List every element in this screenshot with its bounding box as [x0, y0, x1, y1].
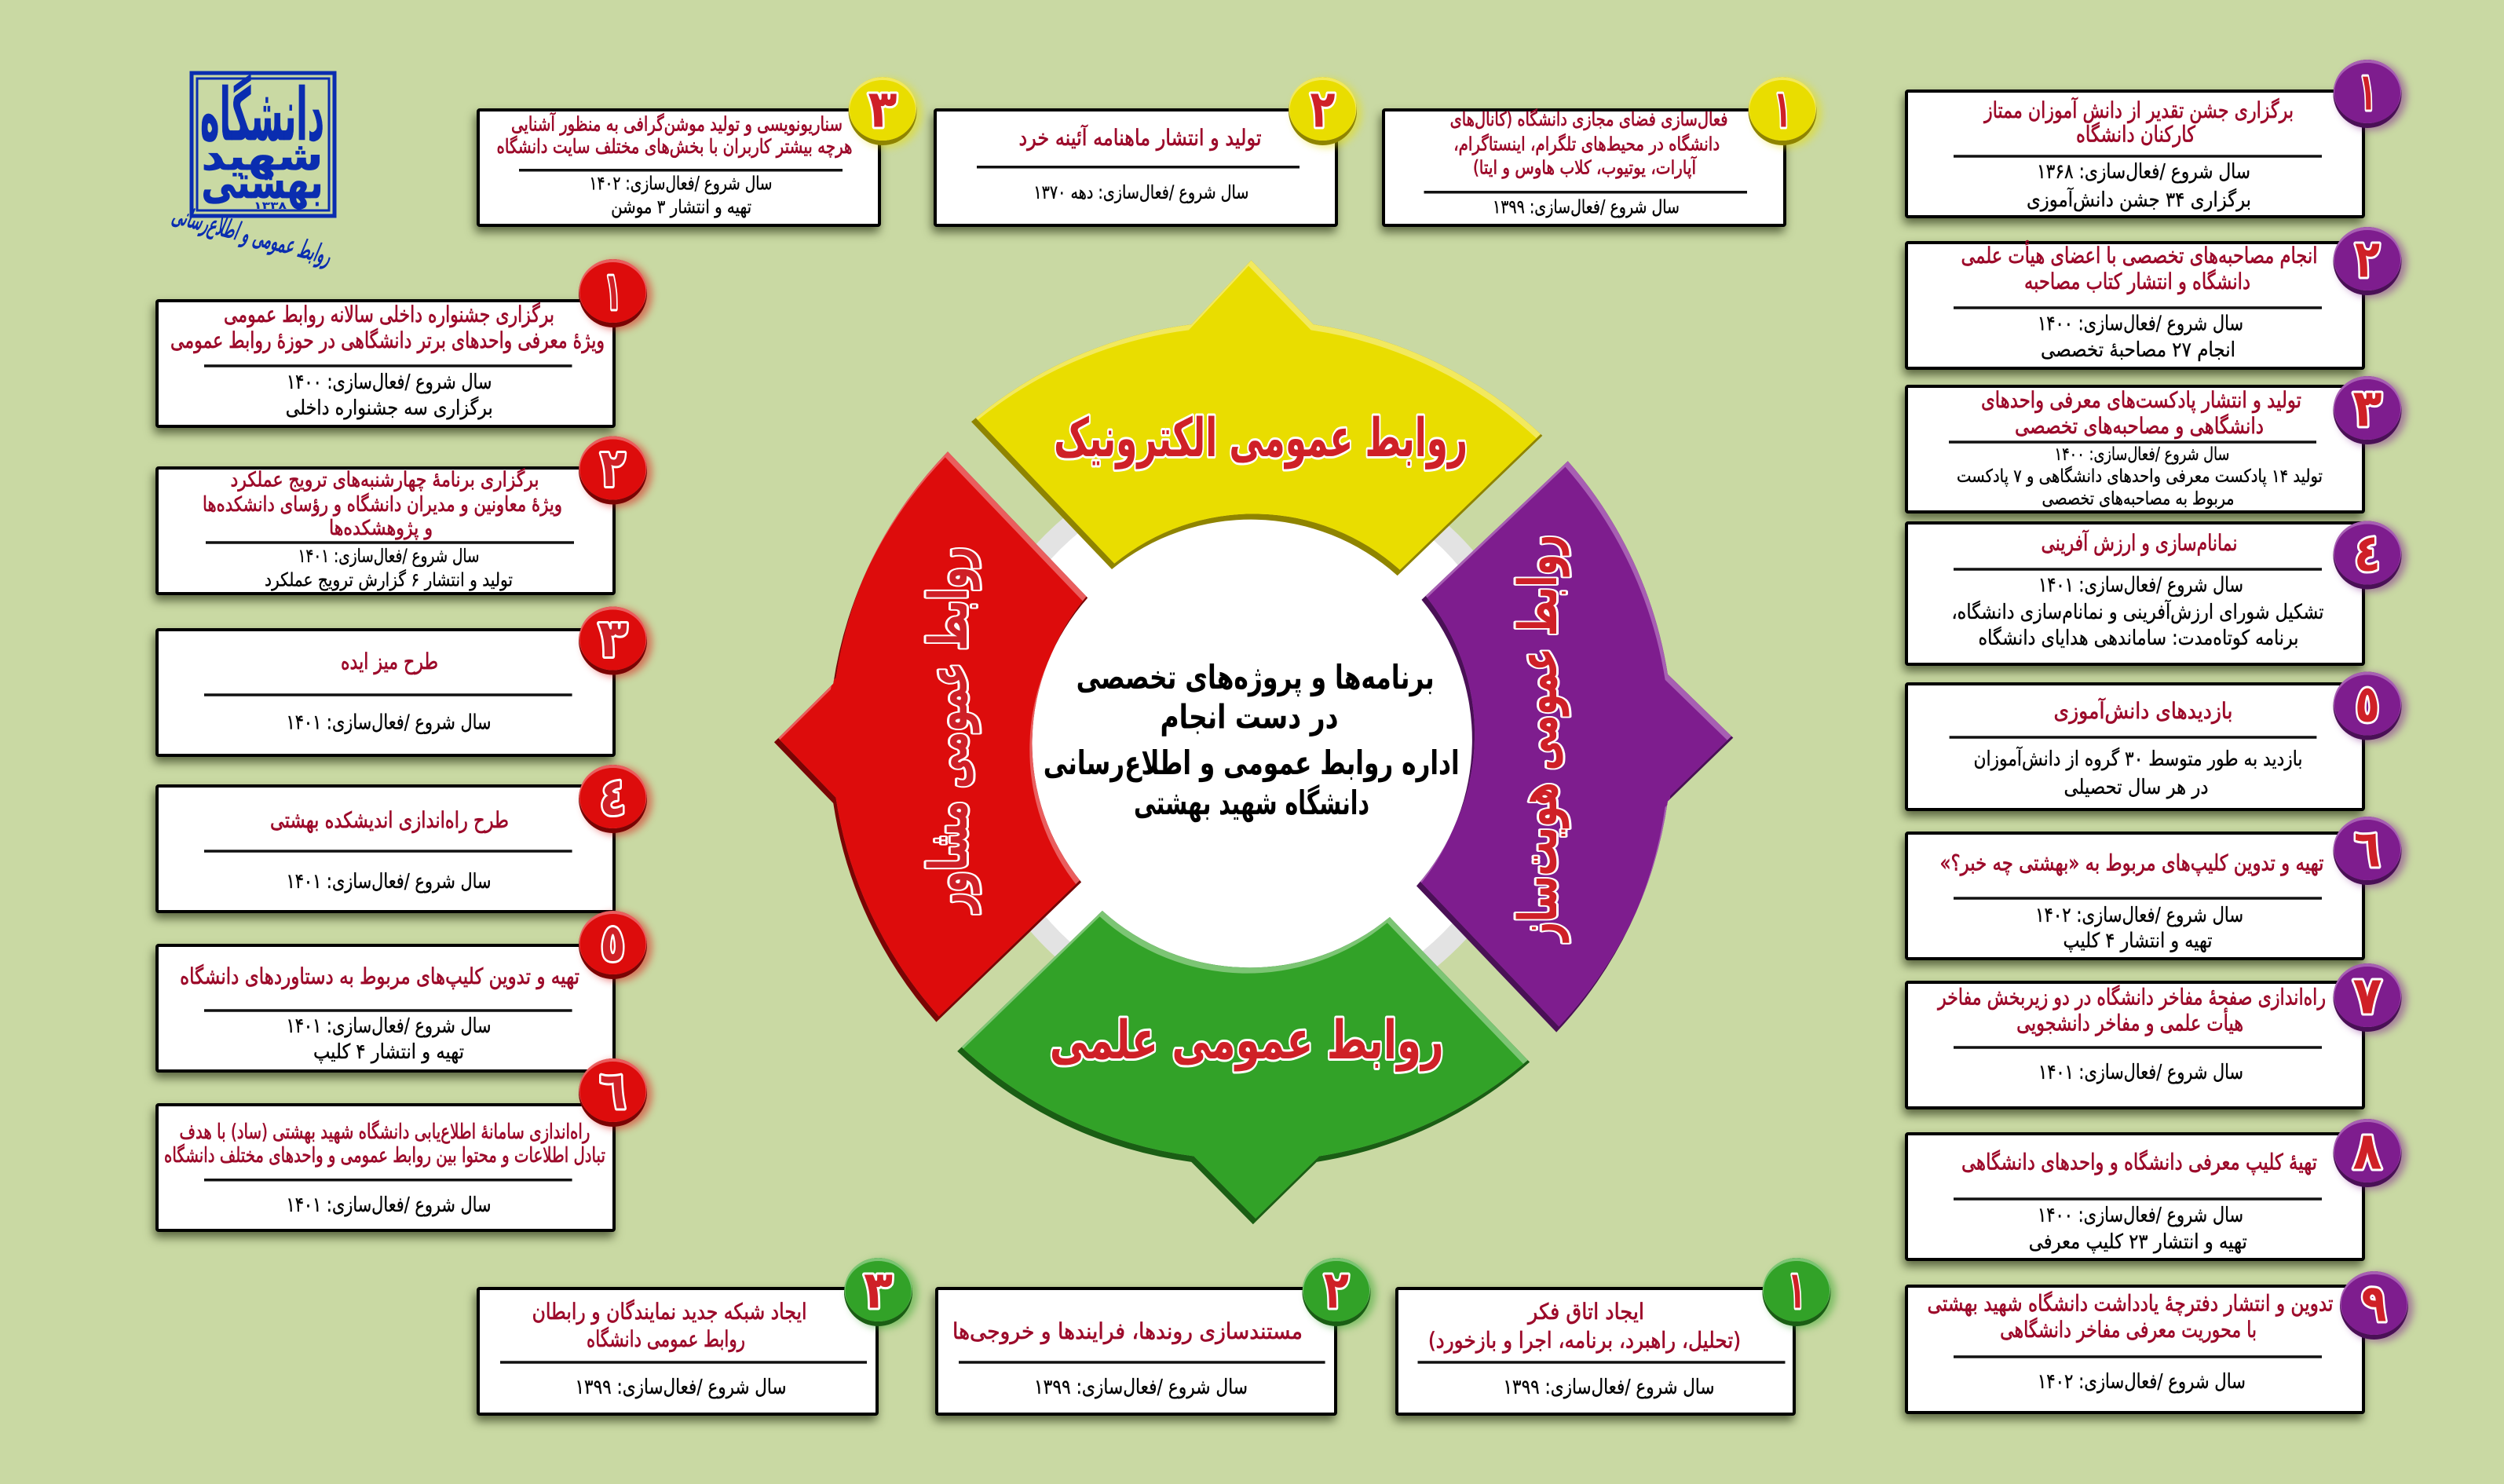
number badge: ۲ [1310, 79, 1335, 140]
details text: انجام ۲۷ مصاحبهٔ تخصصی [2041, 338, 2235, 362]
number badge: ۷ [2352, 966, 2382, 1025]
logo: ۱۳۳۸ [254, 200, 287, 212]
details text: سال شروع /فعال‌سازی: ۱۴۰۰ [2038, 1204, 2243, 1227]
details text: سال شروع /فعال‌سازی: ۱۴۰۰ [2038, 313, 2243, 336]
details text: برنامه کوتاه‌مدت: ساماندهی هدایای دانشگاه [1979, 626, 2299, 650]
number badge [2340, 1271, 2414, 1342]
title text [170, 302, 605, 353]
panel: left card 4 [157, 765, 652, 912]
panel: right card 8 [1906, 1119, 2407, 1259]
details text [286, 1014, 492, 1064]
title text [1961, 239, 2318, 294]
details text: سال شروع /فعال‌سازی: ۱۴۰۲ [2035, 904, 2243, 927]
details text: تهیه و انتشار ۳ موشن [611, 196, 751, 218]
title text: ویژهٔ معاونین و مدیران دانشگاه و رؤسای دانشکده‌ها [203, 492, 562, 517]
title text: برگزاری برنامهٔ چهارشنبه‌های ترویج عملکرد [231, 468, 539, 492]
details text [1974, 746, 2302, 799]
panel: left card 5 [157, 911, 652, 1071]
details text [1957, 444, 2323, 509]
details text: سال شروع /فعال‌سازی: ۱۳۹۹ [1504, 1376, 1715, 1399]
details text: تشکیل شورای ارزش‌آفرینی و نمانام‌سازی دانشگاه، [1952, 599, 2324, 624]
number badge [579, 1058, 652, 1129]
number badge: ۲ [2355, 229, 2380, 289]
details text: تولید و انتشار ۶ گزارش ترویج عملکرد [265, 569, 513, 591]
title text: انجام مصاحبه‌های تخصصی با اعضای هیأت علمی [1961, 239, 2318, 269]
number badge [579, 911, 652, 981]
number badge [579, 437, 652, 507]
panel: bottom card 3 [478, 1258, 917, 1414]
logo: شهید [201, 133, 324, 180]
number badge: ۱ [1788, 1259, 1805, 1321]
title text: آپارات، یوتیوب، کلاب هاوس و ایتا) [1473, 156, 1697, 179]
title text: ویژهٔ معرفی واحدهای برتر دانشگاهی در حوزهٔ روابط عمومی [170, 327, 605, 353]
number badge: ۹ [2362, 1274, 2387, 1333]
details text [1952, 573, 2324, 650]
panel: bottom card 2 [937, 1258, 1376, 1414]
number badge: ۱ [2359, 61, 2376, 122]
details text: سال شروع /فعال‌سازی: ۱۴۰۱ [286, 711, 492, 734]
title text: (تحلیل، راهبرد، برنامه، اجرا و بازخورد) [1428, 1328, 1741, 1354]
number badge [2334, 60, 2407, 130]
number badge: ٦ [2354, 818, 2381, 879]
panel: left card 3 [157, 606, 652, 755]
segment label: identity: روابط عمومی هویت‌ساز [1508, 535, 1570, 943]
title text [532, 1299, 807, 1352]
number badge: ٥ [2355, 674, 2380, 734]
title text: تهیه و تدوین کلیپ‌های مربوط به «بهشتی چه خبر؟» [1939, 850, 2324, 876]
details text [2029, 1204, 2247, 1254]
title text [1981, 387, 2301, 439]
title text [203, 468, 562, 540]
logo [169, 73, 335, 272]
title text: هیأت علمی و مفاخر دانشجویی [2016, 1007, 2243, 1036]
central title: در دست انجام [1161, 697, 1338, 737]
title text: طرح میز ایده [341, 649, 438, 674]
number badge: ۱ [1774, 79, 1791, 140]
details text: برگزاری ۳۴ جشن دانش‌آموزی [2027, 187, 2251, 212]
panel: left card 6 [157, 1058, 652, 1230]
text: دانشگاه [200, 73, 324, 157]
title text: تدوین و انتشار دفترچهٔ یادداشت دانشگاه شهید بهشتی [1927, 1290, 2334, 1316]
title text: و پژوهشکده‌ها [329, 517, 433, 540]
central diagram [772, 254, 1736, 1230]
details text: سال شروع /فعال‌سازی: ۱۳۹۹ [1493, 196, 1680, 218]
panel: right card 2 [1906, 227, 2407, 368]
central title: برنامه‌ها و پروژه‌های تخصصی [1077, 658, 1435, 697]
title text: تبادل اطلاعات و محتوا بین روابط عمومی و واحدهای مختلف دانشگاه [164, 1143, 605, 1168]
panel: top card 3 [478, 77, 922, 225]
panel: right card 1 [1906, 60, 2407, 217]
central title: اداره روابط عمومی و اطلاع‌رسانی [1044, 744, 1460, 783]
number badge [2334, 963, 2407, 1034]
title text [1927, 1290, 2334, 1343]
details text [265, 545, 513, 591]
title text: هرچه بیشتر کاربران با بخش‌های مختلف سایت دانشگاه [496, 135, 853, 158]
details text: سال شروع /فعال‌سازی: ۱۴۰۱ [286, 1193, 492, 1217]
number badge [579, 765, 652, 835]
details text: سال شروع /فعال‌سازی: ۱۴۰۱ [286, 1014, 492, 1038]
details text: مربوط به مصاحبه‌های تخصصی [2042, 488, 2235, 509]
title text: روابط عمومی دانشگاه [587, 1326, 745, 1352]
details text [286, 371, 493, 420]
title text: طرح راه‌اندازی اندیشکده بهشتی [270, 807, 509, 833]
panel: right card 9 [1906, 1271, 2414, 1413]
number badge: ۸ [2352, 1121, 2382, 1181]
title text [496, 112, 853, 158]
title text: بازدیدهای دانش‌آموزی [2054, 698, 2233, 724]
title text: با محوریت معرفی مفاخر دانشگاهی [2000, 1317, 2257, 1343]
panel: right card 6 [1906, 817, 2407, 959]
number badge [844, 1258, 917, 1329]
panel: right card 4 [1906, 521, 2407, 664]
number badge [1762, 1258, 1836, 1329]
title text: تولید و انتشار ماهنامه آئینه خرد [1019, 125, 1261, 151]
details text: سال شروع /فعال‌سازی: ۱۳۶۸ [2037, 160, 2250, 184]
title text [1450, 108, 1728, 179]
segment label: scientific: روابط عمومی علمی [1050, 1010, 1444, 1072]
segment label: advisor: روابط عمومی مشاور [918, 546, 980, 914]
title text: کارکنان دانشگاه [2076, 121, 2196, 148]
details text: تهیه و انتشار ۲۳ کلیپ معرفی [2029, 1230, 2247, 1254]
panel: top card 2 [935, 77, 1362, 225]
number badge [579, 606, 652, 677]
panel: right card 3 [1906, 376, 2407, 512]
title text: ایجاد اتاق فکر [1526, 1299, 1644, 1325]
central title: دانشگاه شهید بهشتی [1134, 784, 1369, 823]
details text: سال شروع /فعال‌سازی: ۱۳۹۹ [1034, 1376, 1248, 1399]
title text: دانشگاهی و مصاحبه‌های تخصصی [2015, 413, 2264, 439]
number badge [2334, 1119, 2407, 1190]
details text [2027, 160, 2251, 212]
details text: تهیه و انتشار ۴ کلیپ [2064, 930, 2213, 953]
logo: بهشتی [201, 155, 324, 210]
title text: راه‌اندازی صفحهٔ مفاخر دانشگاه در دو زیربخش مفاخر [1936, 984, 2326, 1010]
title text: برگزاری جشن تقدیر از دانش آموزان ممتاز [1983, 97, 2294, 123]
logo: روابط عمومی و اطلاع‌رسانی [169, 199, 335, 272]
details text: بازدید به طور متوسط ۳۰ گروه از دانش‌آموزان [1974, 746, 2302, 771]
details text [2035, 904, 2243, 953]
title text: تولید و انتشار پادکست‌های معرفی واحدهای [1981, 387, 2301, 413]
panel: left card 2 [157, 437, 652, 594]
segment label: electronic: روابط عمومی الکترونیک [1054, 408, 1468, 470]
number badge [2334, 227, 2407, 298]
details text: سال شروع /فعال‌سازی: ۱۴۰۱ [298, 545, 479, 567]
number badge: ۳ [598, 609, 627, 669]
panel: right card 7 [1906, 963, 2407, 1108]
title text: دانشگاه و انتشار کتاب مصاحبه [2024, 269, 2250, 294]
details text: در هر سال تحصیلی [2064, 776, 2208, 799]
details text [2038, 313, 2243, 362]
number badge: ۲ [600, 438, 625, 499]
details text [589, 173, 772, 218]
number badge [1302, 1258, 1376, 1329]
details text: سال شروع /فعال‌سازی: ۱۴۰۲ [2038, 1370, 2246, 1394]
title text [1936, 984, 2326, 1036]
number badge: ۲ [1324, 1259, 1349, 1321]
title text: راه‌اندازی سامانهٔ اطلاع‌یابی دانشگاه شهید بهشتی (ساد) با هدف [179, 1120, 590, 1144]
title text: برگزاری جشنواره داخلی سالانه روابط عمومی [224, 302, 554, 327]
number badge: ٤ [600, 766, 627, 828]
number badge [2334, 376, 2407, 447]
number badge [579, 259, 652, 330]
details text: سال شروع /فعال‌سازی: ۱۴۰۱ [286, 870, 492, 894]
title text [164, 1120, 605, 1168]
number badge [1289, 77, 1362, 148]
title text: تهیهٔ کلیپ معرفی دانشگاه و واحدهای دانشگاهی [1961, 1150, 2317, 1175]
title text: تهیه و تدوین کلیپ‌های مربوط به دستاوردهای دانشگاه [180, 963, 579, 989]
title text [1428, 1299, 1741, 1354]
number badge: ۳ [864, 1259, 893, 1321]
title text: مستندسازی روندها، فرایندها و خروجی‌ها [952, 1318, 1303, 1344]
number badge [2334, 817, 2407, 887]
panel: left card 1 [157, 259, 652, 426]
details text: تهیه و انتشار ۴ کلیپ [313, 1040, 464, 1064]
title text: نمانام‌سازی و ارزش آفرینی [2042, 530, 2238, 556]
title text [1983, 97, 2294, 148]
details text: سال شروع /فعال‌سازی: دهه ۱۳۷۰ [1033, 181, 1248, 203]
details text: تولید ۱۴ پادکست معرفی واحدهای دانشگاهی و ۷ پادکست [1957, 466, 2323, 487]
number badge: ۳ [2352, 378, 2382, 438]
panel: bottom card 1 [1397, 1258, 1836, 1414]
number badge: ٥ [600, 912, 625, 974]
details text: سال شروع /فعال‌سازی: ۱۴۰۱ [2038, 1061, 2243, 1084]
panel: right card 5 [1906, 672, 2407, 810]
number badge: ٤ [2354, 523, 2381, 583]
number badge [1748, 77, 1822, 148]
number badge [2334, 521, 2407, 592]
details text: سال شروع /فعال‌سازی: ۱۴۰۰ [2054, 444, 2230, 465]
number badge: ۳ [868, 79, 897, 140]
title text: دانشگاه در محیط‌های تلگرام، اینستاگرام، [1453, 133, 1720, 155]
central title [1044, 658, 1460, 823]
details text: سال شروع /فعال‌سازی: ۱۳۹۹ [576, 1376, 787, 1399]
details text: سال شروع /فعال‌سازی: ۱۴۰۲ [589, 173, 772, 195]
panel: top card 1 [1384, 77, 1822, 225]
number badge: ۱ [605, 261, 622, 322]
details text: سال شروع /فعال‌سازی: ۱۴۰۱ [2038, 573, 2243, 597]
number badge [848, 77, 922, 148]
number badge: ٦ [600, 1060, 627, 1121]
title text: سناریونویسی و تولید موشن‌گرافی به منظور آشنایی [511, 112, 843, 137]
title text: فعال‌سازی فضای مجازی دانشگاه (کانال‌های [1450, 108, 1728, 130]
details text: برگزاری سه جشنواره داخلی [286, 396, 493, 420]
details text: سال شروع /فعال‌سازی: ۱۴۰۰ [287, 371, 492, 394]
number badge [2334, 672, 2407, 743]
title text: ایجاد شبکه جدید نمایندگان و رابطان [532, 1299, 807, 1325]
